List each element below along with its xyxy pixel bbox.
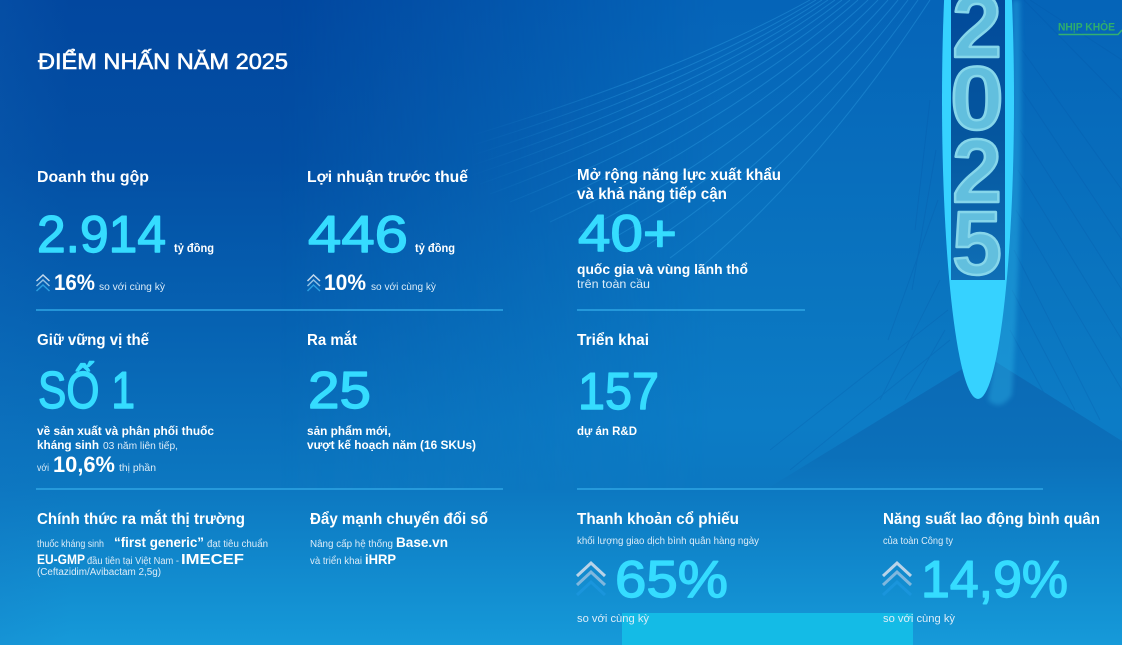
panel: share liquidity xyxy=(577,510,760,625)
panel: market launch: “first generic” xyxy=(114,534,204,550)
triangular stage under the pill xyxy=(812,362,1122,463)
panel: export capacity: quốc gia và vùng lãnh thổ xyxy=(577,261,748,277)
panel: profit before tax: tỷ đồng xyxy=(415,243,455,255)
panel: number one position: SỐ 1 xyxy=(38,361,135,420)
panel: share liquidity: 65% xyxy=(615,551,728,609)
panel: number one position: 10,6% xyxy=(53,452,115,477)
panel: profit before tax: Lợi nhuận trước thuế xyxy=(307,169,468,186)
panel: new products: Ra mắt xyxy=(307,330,358,349)
panel: gross revenue: Doanh thu gộp xyxy=(37,169,149,186)
panel: export capacity: và khả năng tiếp cận xyxy=(577,186,727,203)
panel: R&D projects: Triển khai xyxy=(577,331,649,349)
panel: market launch: (Ceftazidim/Avibactam 2,5g) xyxy=(37,567,161,578)
panel: market launch: EU-GMP xyxy=(37,551,85,567)
panel: gross revenue: 16% xyxy=(54,270,95,295)
panel: digital transformation: iHRP xyxy=(365,551,396,567)
panel: market launch xyxy=(37,509,268,578)
panel: digital transformation: Đẩy mạnh chuyển đổi số xyxy=(310,510,488,528)
panel: export capacity: trên toàn cầu xyxy=(577,277,650,291)
panel: share liquidity: Thanh khoản cổ phiếu xyxy=(577,510,739,528)
panel: profit before tax: 10% xyxy=(324,270,366,295)
panel: share liquidity: so với cùng kỳ xyxy=(577,613,650,625)
panel: share liquidity: khối lượng giao dịch bình quân hàng ngày xyxy=(577,535,760,547)
divider row two xyxy=(36,488,1043,490)
panel: R&D projects: dự án R&D xyxy=(577,424,637,438)
year digits xyxy=(952,0,1002,276)
panel: new products xyxy=(307,330,476,452)
title: ĐIỂM NHẤN NĂM 2025 xyxy=(38,49,288,74)
panel: new products: sản phẩm mới, xyxy=(307,424,391,438)
panel: profit before tax: 446 xyxy=(308,206,408,264)
icon: growth chevrons xyxy=(308,275,320,291)
icon: growth chevrons xyxy=(36,275,50,291)
panel: market launch: Chính thức ra mắt thị trường xyxy=(37,509,245,528)
panel: new products: vượt kế hoạch năm (16 SKUs) xyxy=(307,438,476,452)
panel: number one position: kháng sinh xyxy=(37,438,99,452)
panel: R&D projects: 157 xyxy=(578,363,659,421)
panel: market launch: IMECEF xyxy=(181,551,244,568)
panel: number one position: về sản xuất và phân phối thuốc xyxy=(37,424,214,438)
divider row one xyxy=(36,309,805,311)
logo: Nhịp Khỏe: NHỊP KHỎE xyxy=(1058,20,1115,34)
panel: number one position xyxy=(37,332,214,477)
panel: market launch: thuốc kháng sinh xyxy=(37,538,104,550)
panel: export capacity: Mở rộng năng lực xuất khẩu xyxy=(577,166,781,184)
bottom light-blue block xyxy=(622,613,913,645)
panel: profit before tax xyxy=(307,169,468,295)
panel: labour productivity xyxy=(883,511,1100,625)
panel: labour productivity: 14,9% xyxy=(921,551,1068,609)
panel: number one position: 03 năm liên tiếp, xyxy=(103,440,178,452)
panel: market launch: đầu tiên tại Việt Nam - xyxy=(87,555,179,567)
panel: labour productivity: của toàn Công ty xyxy=(883,535,954,547)
panel: number one position: Giữ vững vị thế xyxy=(37,332,149,349)
panel: digital transformation: và triển khai xyxy=(310,555,362,567)
panel: labour productivity: Năng suất lao động bình quân xyxy=(883,511,1100,528)
panel: number one position: thị phần xyxy=(119,462,156,474)
panel: export capacity: 40+ xyxy=(578,205,677,263)
panel: market launch: đạt tiêu chuẩn xyxy=(207,538,268,550)
panel: gross revenue: 2.914 xyxy=(37,206,166,264)
icon: growth chevrons xyxy=(577,563,605,595)
year digits: 2 xyxy=(952,122,1002,222)
panel: labour productivity: so với cùng kỳ xyxy=(883,613,956,625)
panel: gross revenue xyxy=(36,169,214,295)
panel: digital transformation: Base.vn xyxy=(396,534,448,550)
icon: growth chevrons xyxy=(883,563,911,595)
panel: new products: 25 xyxy=(308,362,371,420)
pill with 2025 xyxy=(942,0,1021,405)
panel: gross revenue: tỷ đồng xyxy=(174,243,214,255)
year digits: 5 xyxy=(952,194,1002,294)
panel: number one position: với xyxy=(37,462,49,474)
panel: R&D projects xyxy=(577,331,659,438)
panel: digital transformation xyxy=(310,510,488,567)
panel: export capacity xyxy=(577,166,781,291)
panel: gross revenue: so với cùng kỳ xyxy=(99,281,166,293)
year digits: 0 xyxy=(950,49,1004,149)
panel: digital transformation: Nâng cấp hệ thống xyxy=(310,538,393,550)
panel: profit before tax: so với cùng kỳ xyxy=(371,281,437,293)
